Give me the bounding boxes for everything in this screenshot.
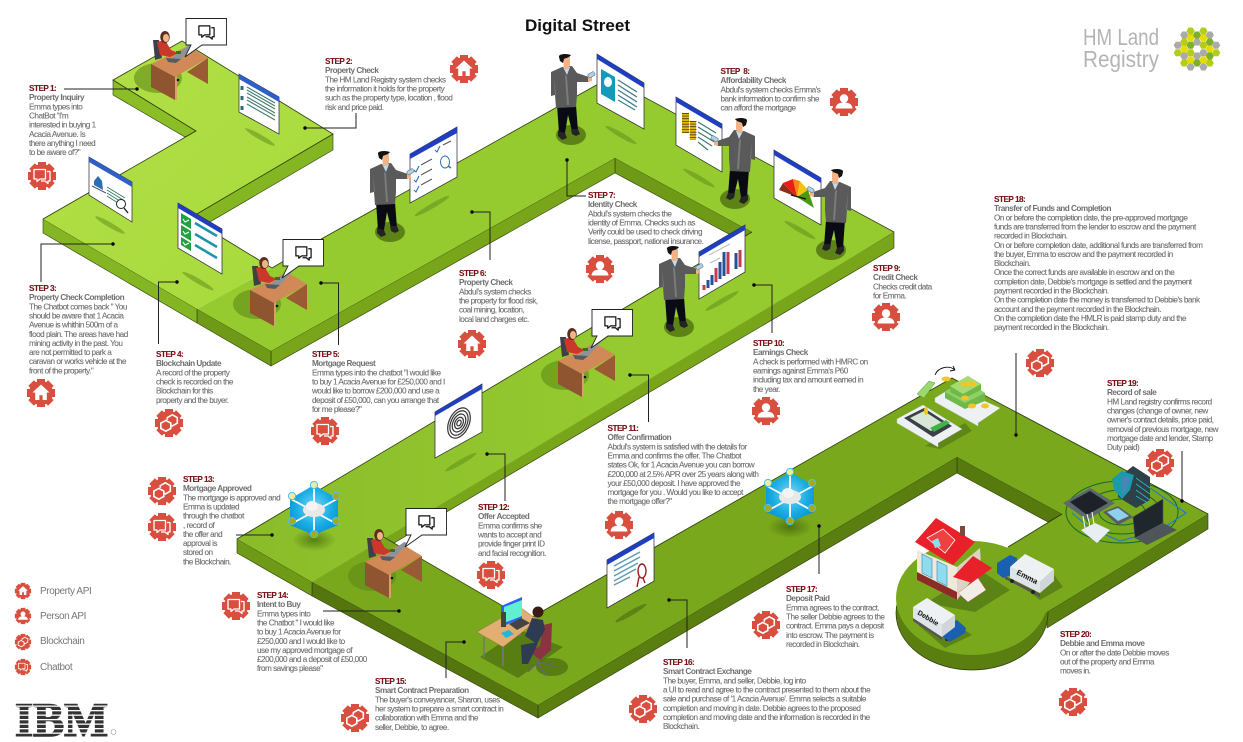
- step 18 text: the buyer, Emma to escrow and the payment recorded in: [994, 250, 1174, 259]
- connector: step 7: [565, 158, 586, 196]
- step 10 text: earnings against Emma's P60: [753, 366, 849, 375]
- step 20 text: moves in.: [1060, 667, 1091, 676]
- step 11 text: states Ok, for 1 Acacia Avenue you can borrow: [608, 461, 755, 470]
- step 2 text: the information it holds for the property: [325, 84, 446, 93]
- step 19 text: changes (change of owner, new: [1107, 406, 1208, 415]
- panel: house search screen: [89, 157, 132, 236]
- step 13 text: , record of: [183, 521, 215, 530]
- connector: step 12: [485, 452, 505, 501]
- person: analyst step 8: [711, 118, 755, 209]
- money transfer phones: [897, 376, 1000, 449]
- network devices and server: [1063, 466, 1186, 545]
- step 6 text: coal mining, location,: [459, 306, 524, 315]
- connector: step 10: [752, 283, 772, 333]
- step 15 text: Smart Contract Preparation: [375, 686, 469, 695]
- icon: step 6 property: [458, 330, 486, 358]
- step 4 text: A record of the property: [156, 368, 231, 377]
- step 10 text: Earnings Check: [753, 348, 809, 357]
- panel: checks and search screen: [410, 127, 457, 218]
- step 18 text: STEP 18:: [994, 195, 1025, 204]
- icon: step 19 blockchain: [1146, 449, 1174, 477]
- step 11 text: your £50,000 deposit. I have approved the: [608, 479, 741, 488]
- icon: step 7 person: [586, 255, 614, 283]
- step 17 text: recorded in Blockchain.: [786, 640, 860, 649]
- step 4 text: property and the buyer.: [156, 396, 229, 405]
- step 12 text: and facial recognition.: [478, 549, 546, 558]
- step 18 text: Transfer of Funds and Completion: [994, 204, 1111, 213]
- step 11 text: £200,000 at 2.5% APR over 25 years along with: [608, 470, 759, 479]
- desk: Emma at step 14: [348, 508, 446, 598]
- step 18 text: Once the correct funds are available in escrow and on the: [994, 268, 1175, 277]
- icon: step 3 property: [27, 379, 55, 407]
- step 5 text: Mortgage Request: [312, 359, 376, 368]
- step 1 text: Property Inquiry: [29, 93, 85, 102]
- step 3 text: flood plain. The areas have had: [29, 330, 129, 339]
- step 20 text: On or after the date Debbie moves: [1060, 648, 1169, 657]
- step 2 text: The HM Land Registry system checks: [325, 75, 446, 84]
- step 18 text: recorded in Blockchain.: [994, 232, 1068, 241]
- step 3 text: are not permitted to park a: [29, 348, 112, 357]
- step 6 text: Property Check: [459, 278, 513, 287]
- step 20 text: STEP 20:: [1060, 630, 1091, 639]
- panel: affordability coins screen: [676, 97, 722, 189]
- house: [915, 518, 1010, 612]
- panel: earnings bar chart screen: [699, 225, 745, 313]
- icon: step 18 blockchain: [1026, 349, 1054, 377]
- connector: step 14: [323, 609, 401, 613]
- step 1 text: ChatBot “I'm: [29, 111, 69, 120]
- step 16 text: completion and moving in date. Debbie agrees to the proposed: [663, 704, 861, 713]
- step 5 text: deposit of £50,000, can you arrange that: [312, 396, 440, 405]
- step 20 text: out of the property and Emma: [1060, 657, 1155, 666]
- step 6 text: STEP 6:: [459, 269, 486, 278]
- step 13 text: STEP 13:: [183, 475, 214, 484]
- step 1 text: there anything I need: [29, 139, 96, 148]
- step 17 text: The seller Debbie agrees to the: [786, 612, 885, 621]
- icon: step 9 person: [872, 303, 900, 331]
- connector: step 5: [319, 281, 338, 345]
- connector: step 16: [667, 598, 687, 648]
- step 18 text: funds are transferred from the lender to escrow and the payment: [994, 222, 1197, 231]
- step 18 text: payment recorded in the Blockchain.: [994, 286, 1109, 296]
- step 17 text: Emma agrees to the contract.: [786, 603, 879, 612]
- step 9 text: Credit Check: [873, 273, 918, 282]
- connector: step 19: [1180, 451, 1184, 503]
- step 15 text: STEP 15:: [375, 677, 406, 686]
- step 7 text: STEP 7:: [588, 191, 615, 200]
- person: analyst step 7: [551, 54, 595, 145]
- icon: step 10 person: [752, 397, 780, 425]
- step 8 text: bank information to confirm she: [720, 94, 820, 103]
- icon: step 4 blockchain: [155, 409, 183, 437]
- legend: Blockchain: [40, 636, 84, 647]
- step 19 text: STEP 19:: [1107, 379, 1138, 388]
- step 16 text: sale and purchase of '1 Acacia Avenue'. Emma selects a suitable: [663, 695, 867, 704]
- logo: HM Land Registry: Registry: [1083, 46, 1159, 72]
- title: Digital Street: [525, 16, 630, 35]
- icon: step 8 person: [830, 88, 858, 116]
- legend: Person API: [40, 611, 86, 622]
- step 12 text: wants to accept and: [477, 530, 542, 539]
- step 14 text: the Chatbot " I would like: [257, 618, 335, 627]
- step 3 text: mining activity in the past. You: [29, 339, 123, 348]
- step 3 text: caravan or works vehicle at the: [29, 357, 127, 366]
- step 13 text: through the chatbot: [183, 512, 245, 521]
- icon: blockchain hub step 13: [288, 481, 340, 551]
- step 9 text: STEP 9:: [873, 264, 900, 273]
- step 16 text: Smart Contract Exchange: [663, 667, 752, 676]
- desk: Emma at step 11: [541, 310, 632, 397]
- step 19 text: HM Land registry confirms record: [1107, 397, 1213, 406]
- step 1 text: STEP 1:: [29, 84, 56, 93]
- step 13 text: the Blockchain.: [183, 557, 231, 566]
- step 10 text: including tax and amount earned in: [753, 376, 864, 385]
- connector: step 3: [41, 242, 115, 282]
- icon: step 20 blockchain: [1059, 688, 1087, 716]
- truck: Emma: [997, 554, 1063, 600]
- step 6 text: local land charges etc.: [459, 315, 529, 324]
- step 20 text: Debbie and Emma move: [1060, 639, 1145, 648]
- panel: property list screen: [239, 74, 279, 148]
- step 18 text: On the completion date the HMLR is paid stamp duty and the: [994, 314, 1187, 323]
- step 14 text: STEP 14:: [257, 591, 288, 600]
- step 13 text: the offer and: [183, 530, 223, 539]
- step 3 text: Avenue is whithin 500m of a: [29, 321, 118, 330]
- icon: step 17 blockchain: [752, 611, 780, 639]
- step 10 text: STEP 10:: [753, 339, 784, 348]
- step 12 text: STEP 12:: [478, 503, 509, 512]
- connector: step 18: [1014, 353, 1018, 437]
- person: analyst step 6: [370, 151, 414, 242]
- step 16 text: The buyer, Emma, and seller, Debbie, log into: [663, 676, 807, 685]
- desk: Emma at step 5: [233, 240, 324, 326]
- connector: step 15: [446, 640, 466, 678]
- step 10 text: the year.: [753, 385, 780, 394]
- step 14 text: £250,000 and I would like to: [257, 637, 346, 646]
- connector: step 13: [236, 533, 274, 537]
- step 18 text: On or before the completion date, the pre-approved mortgage: [994, 213, 1188, 222]
- step 14 text: £200,000 and a deposit of £50,000: [257, 655, 368, 664]
- step 14 text: to buy 1 Acacia Avenue for: [257, 628, 341, 637]
- connector: step 11: [628, 373, 648, 422]
- conveyancer at workstation: [477, 597, 568, 678]
- step 19 text: removal of previous mortgage, new: [1107, 425, 1219, 434]
- step 6 text: Abdul's system checks: [459, 287, 531, 296]
- step 12 text: Offer Accepted: [478, 512, 530, 521]
- connector: step 2: [303, 113, 356, 130]
- step 8 text: Affordability Check: [720, 76, 787, 85]
- step 13 text: approval is: [183, 539, 217, 548]
- step 15 text: The buyer's conveyancer, Sharon, uses: [375, 695, 500, 704]
- step 1 text: interested in buying 1: [29, 121, 97, 130]
- step 15 text: collaboration with Emma and the: [375, 714, 479, 723]
- step 1 text: Acacia Avenue. Is: [29, 130, 86, 139]
- step 5 text: Emma types into the chatbot "I would like: [312, 368, 441, 377]
- step 3 text: The Chatbot comes back " You: [29, 302, 128, 311]
- step 13 text: stored on: [183, 548, 214, 557]
- connector: step 17: [817, 524, 821, 574]
- step 17 text: Deposit Paid: [786, 594, 830, 603]
- step 3 text: Property Check Completion: [29, 293, 125, 302]
- step 11 text: mortgage for you . Would you like to accept: [608, 488, 744, 497]
- step 3 text: STEP 3:: [29, 284, 56, 293]
- step 4 text: Blockchain Update: [156, 359, 222, 368]
- step 5 text: for me please?": [312, 405, 362, 414]
- step 13 text: Mortgage Approved: [183, 484, 252, 493]
- step 4 text: Blockchain for this: [156, 387, 213, 396]
- connector: step 4: [158, 280, 179, 344]
- step 19 text: Record of sale: [1107, 388, 1157, 397]
- logo: HM Land Registry: [1083, 24, 1220, 72]
- step 16 text: completion and moving date and the information is recorded in the: [663, 713, 871, 722]
- step 10 text: A check is performed with HMRC on: [753, 357, 869, 366]
- panel: fingerprint screen: [435, 384, 482, 473]
- panel: credit score gauge screen: [774, 150, 821, 241]
- icon: step 5 chatbot: [311, 417, 339, 445]
- step 18 text: completion date, Debbie's mortgage is settled and the payment: [994, 277, 1193, 286]
- step 14 text: from savings please": [257, 664, 323, 673]
- step 11 text: the mortgage offer?": [608, 497, 672, 506]
- icon: step 1 chatbot: [28, 162, 56, 190]
- panel: checklist screen: [178, 203, 222, 292]
- icon: step 16 blockchain: [629, 695, 657, 723]
- person: analyst step 10: [659, 246, 703, 337]
- step 19 text: mortgage date and lender, Stamp: [1107, 434, 1214, 443]
- step 11 text: Abdul's system is satisfied with the details for: [608, 442, 747, 451]
- step 15 text: seller, Debbie, to agree.: [375, 723, 449, 732]
- truck: Debbie: [913, 598, 972, 648]
- step 1 text: to be aware of?": [29, 148, 81, 157]
- step 4 text: STEP 4:: [156, 350, 183, 359]
- step 13 text: Emma is updated: [183, 502, 240, 511]
- step 7 text: license, passport, national insurance.: [588, 237, 704, 246]
- icon: step 15 blockchain: [341, 704, 369, 732]
- step 4 text: check is recorded on the: [156, 377, 234, 386]
- step 18 text: account and the payment recorded in the Blockchain.: [994, 305, 1161, 314]
- step 12 text: provide finger print ID: [478, 540, 545, 549]
- step 5 text: STEP 5:: [312, 350, 339, 359]
- truck: Emma: Emma: [1015, 568, 1040, 586]
- step 1 text: Emma types into: [29, 102, 83, 111]
- step 7 text: Identity Check: [588, 200, 638, 209]
- person: analyst step 9: [807, 169, 851, 260]
- step 2 text: such as the property type, location , flood: [325, 94, 453, 103]
- step 18 text: On the completion date the money is transferred to Debbie's bank: [994, 296, 1201, 305]
- step 3 text: should be aware that 1 Acacia: [29, 311, 124, 320]
- step 18 text: Blockchain.: [994, 259, 1030, 268]
- step 19 text: Duty paid): [1107, 443, 1140, 452]
- legend: Chatbot: [40, 662, 73, 673]
- step 11 text: Emma and confirms the offer. The Chatbot: [608, 451, 742, 460]
- step 3 text: front of the property.": [29, 366, 94, 375]
- step 14 text: Intent to Buy: [257, 600, 301, 609]
- step 19 text: owner's contact details, price paid,: [1107, 416, 1214, 425]
- desk: Emma at step 1: [134, 18, 226, 100]
- step 7 text: identity of Emma. Checks such as: [588, 218, 695, 227]
- step 9 text: for Emma.: [873, 291, 906, 300]
- step 11 text: Offer Confirmation: [608, 433, 672, 442]
- step 5 text: would like to borrow £200,000 and use a: [311, 387, 440, 396]
- icon: step 13 blockchain: [148, 477, 176, 505]
- step 7 text: Verify could be used to check driving: [588, 228, 703, 237]
- step 2 text: Property Check: [325, 66, 379, 75]
- step 18 text: payment recorded in the Blockchain.: [994, 323, 1109, 332]
- icon: step 12 chatbot: [477, 561, 505, 589]
- step 15 text: her system to prepare a smart contract in: [375, 704, 504, 713]
- step 17 text: into escrow. The payment is: [786, 631, 874, 640]
- step 16 text: Blockchain.: [663, 722, 699, 731]
- step 2 text: risk and price paid.: [325, 103, 384, 112]
- legend: Property API: [40, 586, 91, 597]
- icon: step 2 property: [450, 55, 478, 83]
- step 8 text: STEP 8:: [720, 67, 750, 76]
- step 9 text: Checks credit data: [873, 282, 933, 291]
- connector: step 1: [64, 87, 139, 91]
- step 16 text: STEP 16:: [663, 658, 694, 667]
- step 7 text: Abdul's system checks the: [588, 209, 672, 218]
- step 16 text: a UI to read and agree to the contract presented to them about the: [663, 685, 871, 694]
- step 2 text: STEP 2:: [325, 57, 352, 66]
- step 8 text: Abdul's system checks Emma's: [720, 85, 821, 94]
- step 5 text: to buy 1 Acacia Avenue for £250,000 and I: [312, 377, 445, 386]
- arrow: funds transfer: [935, 366, 955, 375]
- step 13 text: The mortgage is approved and: [183, 493, 281, 502]
- truck: Debbie: Debbie: [916, 610, 940, 628]
- step 17 text: STEP 17:: [786, 585, 817, 594]
- icon: step 11 person: [605, 511, 633, 539]
- logo: HM Land Registry: HM Land: [1083, 24, 1159, 50]
- step 11 text: STEP 11:: [608, 424, 638, 433]
- step 14 text: use my approved mortgage of: [257, 646, 353, 655]
- step 12 text: Emma confirms she: [478, 521, 543, 530]
- legend: [15, 583, 91, 675]
- panel: signed contract screen: [607, 533, 654, 624]
- icon: step 13 chatbot: [148, 513, 176, 541]
- step 17 text: contract. Emma pays a deposit: [786, 622, 885, 631]
- step 18 text: On or before completion date, additional funds are transferred from: [994, 241, 1203, 250]
- step 6 text: the property for flood risk,: [459, 296, 538, 305]
- step 14 text: Emma types into: [257, 609, 311, 618]
- step 8 text: can afford the mortgage: [720, 104, 797, 113]
- icon: blockchain hub step 17: [764, 468, 816, 538]
- connector: step 6: [470, 210, 490, 260]
- panel: identity screen: [597, 54, 644, 146]
- icon: step 14 chatbot: [222, 592, 250, 620]
